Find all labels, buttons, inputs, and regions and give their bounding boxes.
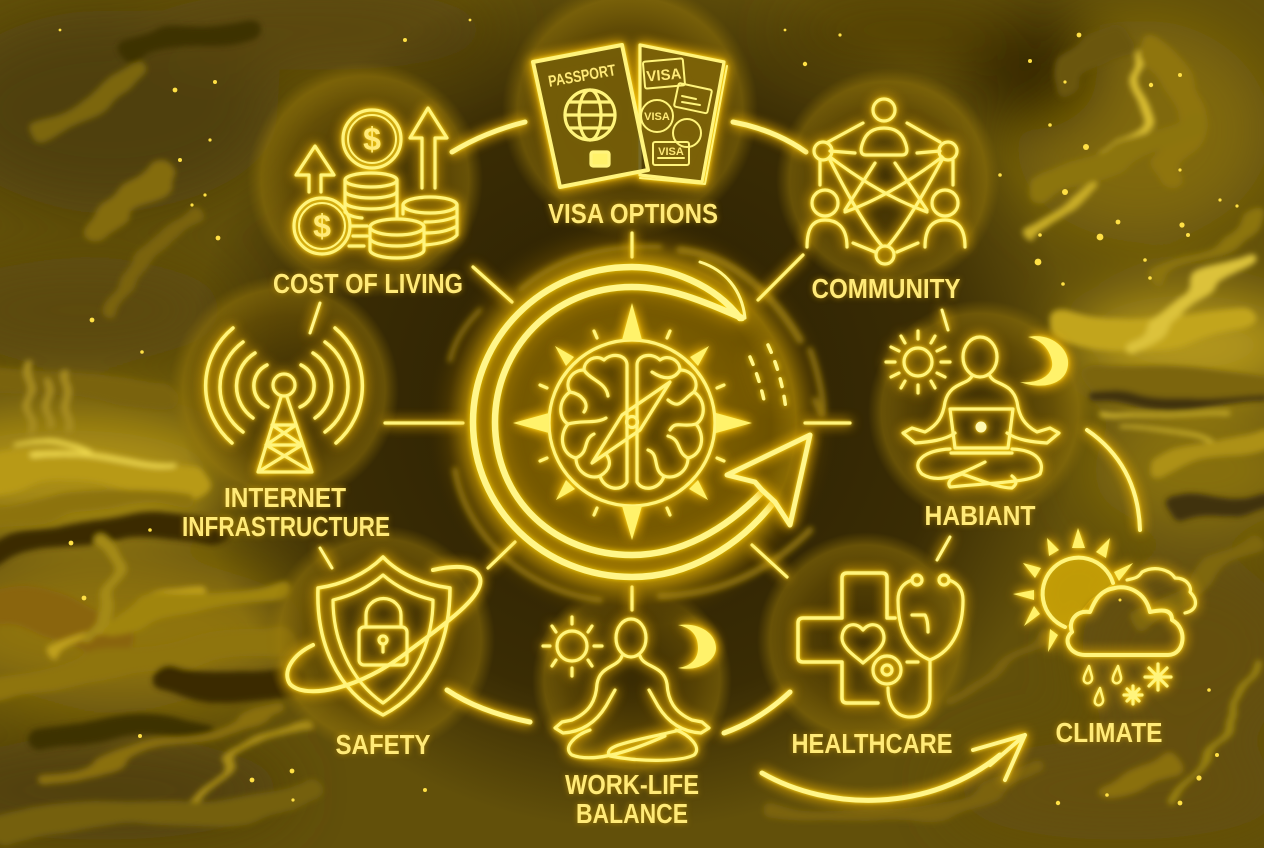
icon halos (169, 0, 1092, 780)
label: healthcare: HEALTHCARE (792, 728, 952, 759)
hub compass brain (513, 303, 752, 540)
node: community (807, 99, 965, 304)
label: climate: CLIMATE (1056, 717, 1162, 748)
visa stamp text: VISA (646, 65, 682, 85)
passport cover text: PASSPORT (547, 62, 617, 91)
label: internet infrastructure: INTERNET (224, 482, 346, 513)
spokes from hub (385, 233, 850, 610)
arrow: lower sweep to climate (762, 735, 1025, 800)
icon: coins and arrows: $ (313, 208, 331, 244)
icon: people network (807, 99, 965, 264)
icon: medical cross and stethoscope (798, 573, 963, 717)
label: safety: SAFETY (336, 729, 431, 760)
visa stamp text: VISA (658, 146, 684, 158)
node: climate (1013, 528, 1195, 748)
brush swirls around hub (450, 247, 823, 600)
visa stamp text: VISA (644, 111, 670, 123)
label: cost of living: COST OF LIVING (273, 268, 463, 299)
visa stamp text (644, 65, 684, 158)
label: work-life balance: WORK-LIFE (565, 769, 699, 800)
icon: meditating person (543, 617, 716, 760)
hub ring (473, 262, 786, 577)
label: community: COMMUNITY (812, 273, 961, 304)
icon: shield with lock (287, 557, 480, 715)
node: healthcare (792, 573, 963, 759)
node: cost of living (273, 108, 463, 299)
icon: sun cloud rain snow (1013, 528, 1195, 705)
hub arrow (727, 435, 810, 525)
icon: signal tower (206, 328, 362, 472)
label: visa options: VISA OPTIONS (548, 198, 718, 229)
node: safety (287, 557, 480, 760)
central hub (473, 262, 810, 577)
node: work-life balance (543, 617, 716, 829)
node: habiant (886, 331, 1068, 531)
label: internet infrastructure: INFRASTRUCTURE (182, 511, 390, 542)
label: internet infrastructure (182, 482, 390, 542)
node: internet infrastructure (182, 328, 390, 542)
label: work-life balance (565, 769, 699, 829)
icon: passports (533, 45, 727, 187)
label: habiant: HABIANT (924, 500, 1036, 531)
icon: coins and arrows: $ (363, 121, 381, 157)
node: visa options (533, 45, 727, 229)
icon: coins and arrows (294, 108, 457, 258)
label: work-life balance: BALANCE (576, 798, 688, 829)
outer ring connectors (310, 122, 1140, 733)
icon: meditating person with laptop (886, 331, 1068, 488)
